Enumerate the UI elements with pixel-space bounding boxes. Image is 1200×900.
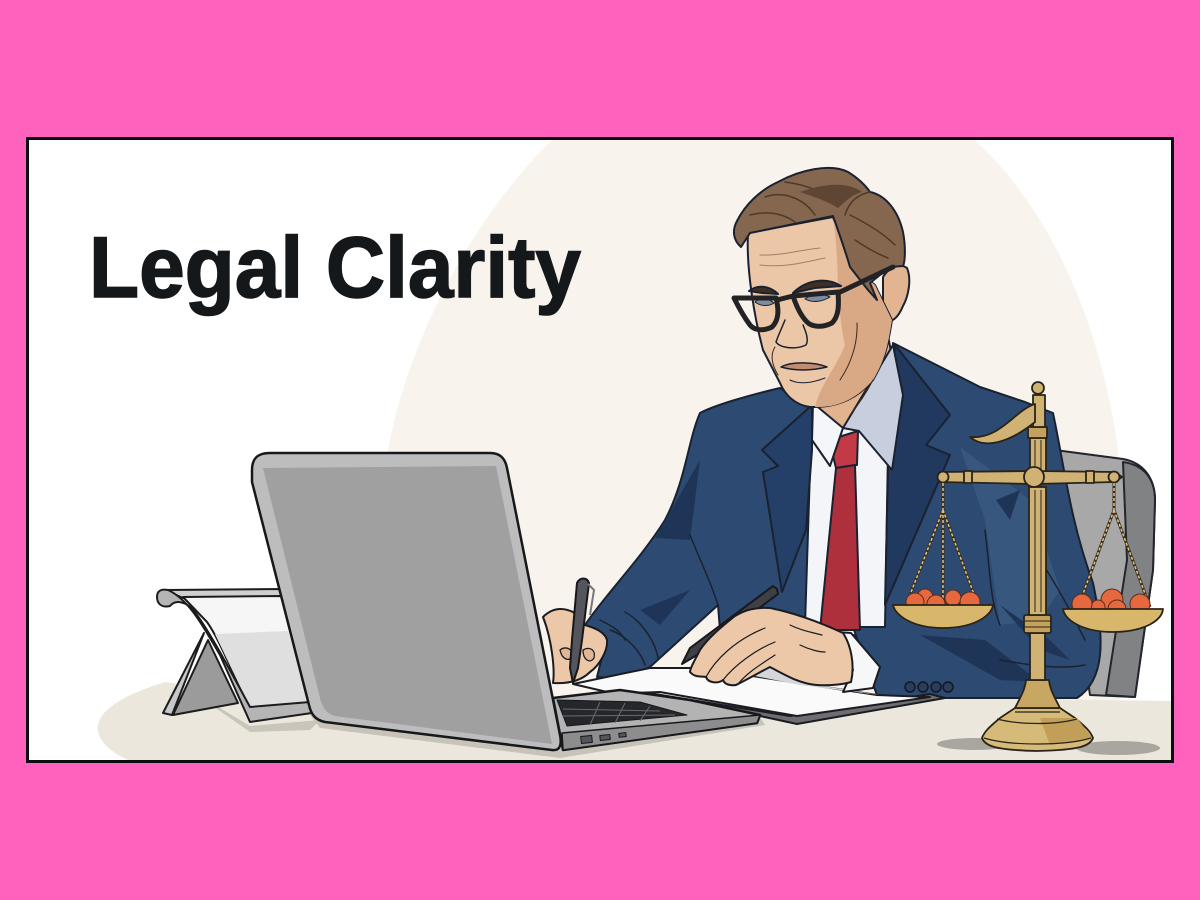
right hand	[690, 608, 853, 685]
jacket cuff buttons	[905, 682, 953, 692]
left pan fruit	[906, 589, 980, 613]
brass scales of justice	[893, 382, 1163, 755]
pen under right hand	[682, 586, 778, 664]
white shirt cuff	[837, 632, 880, 692]
scale base	[982, 680, 1093, 751]
right chains	[1077, 483, 1150, 610]
cream background circle	[388, 140, 1120, 700]
right pan fruit	[1072, 589, 1150, 618]
scale post	[970, 382, 1051, 680]
red necktie	[820, 431, 860, 630]
eyeglasses	[734, 267, 893, 330]
desk surface	[98, 682, 1171, 760]
pen in left hand	[570, 578, 594, 683]
open laptop	[252, 453, 765, 758]
title: Legal Clarity	[89, 220, 581, 316]
nose and mouth	[760, 248, 873, 415]
left hand	[543, 609, 607, 683]
right pan	[1063, 609, 1163, 632]
scale shadows	[937, 738, 1160, 755]
left pan	[893, 605, 993, 628]
face	[748, 217, 892, 407]
eyebrows and eyes	[749, 281, 841, 306]
ear	[883, 266, 909, 322]
neck and collar	[810, 320, 903, 470]
lawyer	[585, 168, 1101, 698]
hair	[734, 168, 905, 300]
folder tablet on stand	[157, 589, 320, 732]
left chains	[908, 483, 975, 607]
scale beam	[938, 467, 1122, 487]
face shading	[815, 217, 892, 407]
shirt	[805, 345, 900, 640]
notebook	[573, 668, 945, 724]
hair strands	[750, 182, 895, 258]
suit jacket	[585, 343, 1101, 698]
office chair	[1055, 450, 1155, 697]
